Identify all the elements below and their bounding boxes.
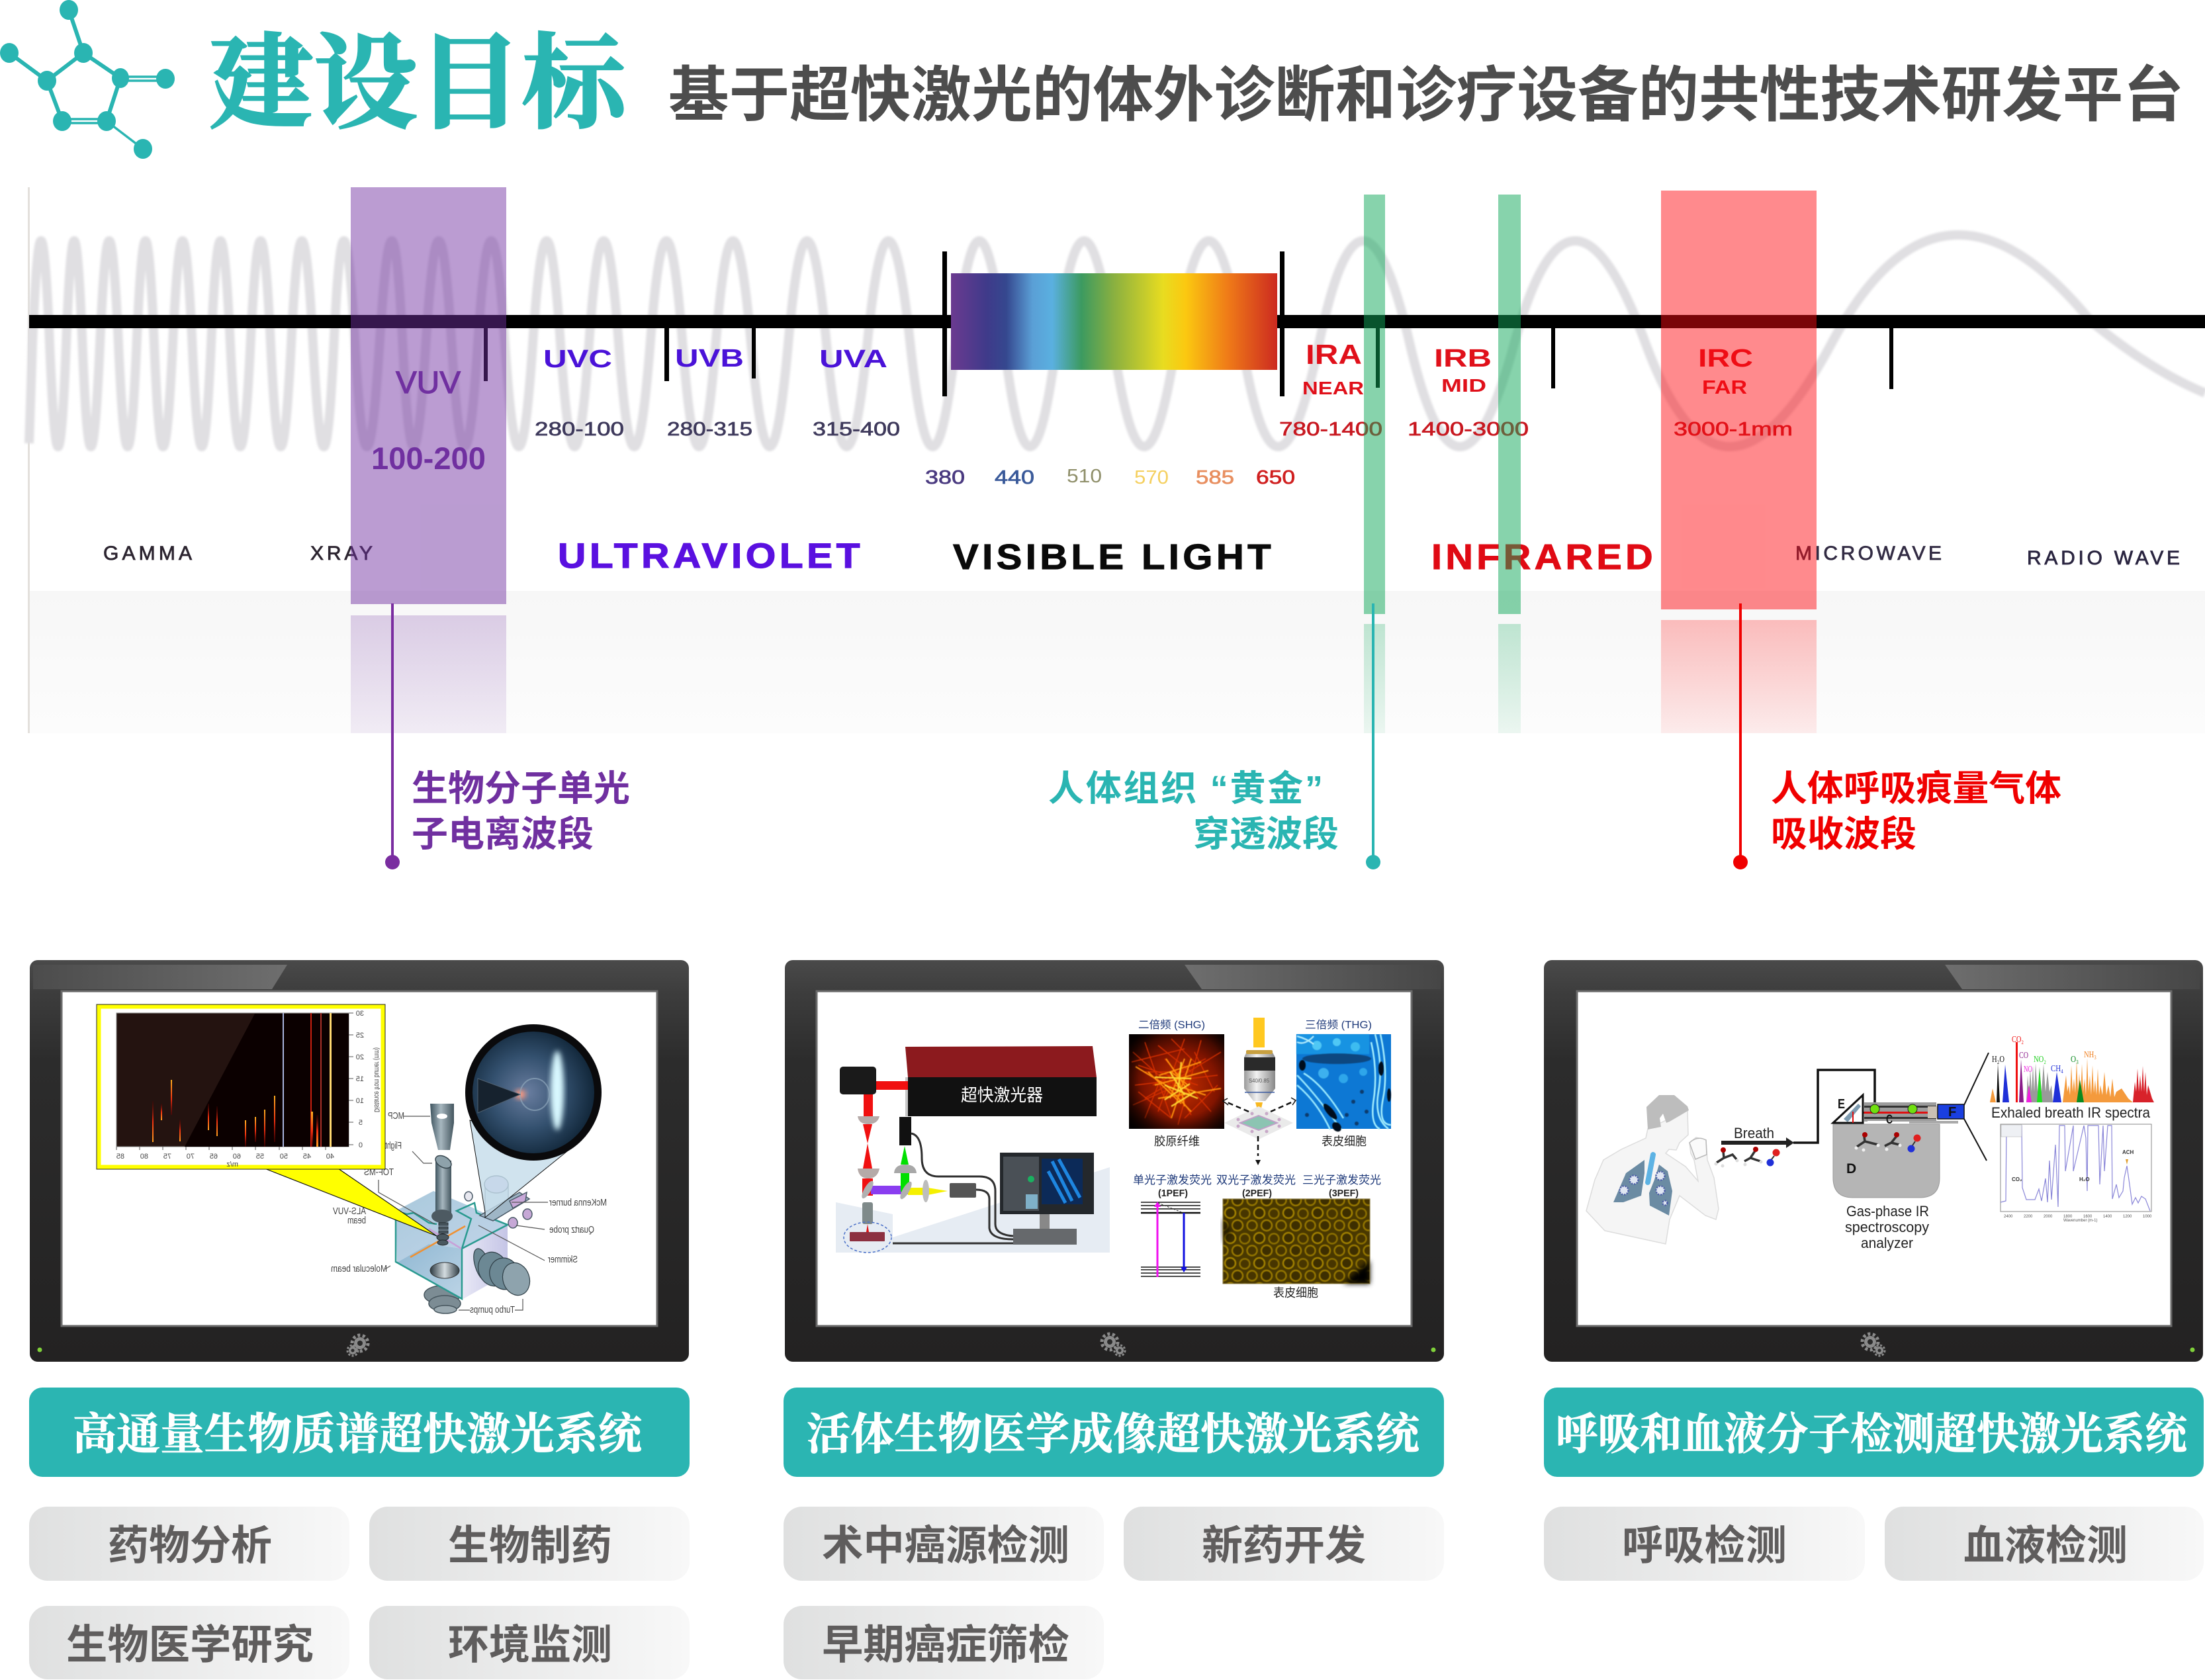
- right wall: [462, 1225, 508, 1299]
- monitor screen: [1577, 991, 2171, 1326]
- scan head: [840, 1067, 876, 1094]
- heat map axis labels (mirrored): 0: [359, 1141, 363, 1149]
- band labels: ultraviolet: UVC: [543, 345, 612, 373]
- power LED: [2190, 1347, 2194, 1352]
- tag: 生物制药: [369, 1507, 690, 1581]
- callout text: VUV band: 子电离波段: [412, 815, 594, 854]
- flame halo: [520, 1079, 549, 1110]
- gear icon: [1862, 1334, 1885, 1356]
- heat map axis labels (mirrored): 85: [116, 1153, 124, 1161]
- heat map axis labels (mirrored): 60: [233, 1153, 241, 1161]
- flight tube top: [433, 1153, 453, 1171]
- wavelength labels: ultraviolet: [535, 419, 900, 440]
- region labels: ULTRAVIOLET: [558, 537, 864, 576]
- tag: 环境监测: [369, 1606, 690, 1679]
- detector F: F: [1948, 1105, 1956, 1120]
- tag: 早期癌症筛检: [784, 1606, 1104, 1679]
- region labels: MICROWAVE: [1795, 543, 1942, 564]
- mirrored apparatus labels: McKenna burner: [549, 1197, 607, 1208]
- cables: [893, 1133, 1013, 1243]
- tag: 术中癌源检测: 术中癌源检测: [822, 1523, 1069, 1569]
- right turbo pump: [471, 1247, 534, 1299]
- tag: 药物分析: 药物分析: [108, 1523, 272, 1569]
- sine wave: [29, 235, 2205, 447]
- yellow inset frame: [99, 1006, 383, 1167]
- breath arrow: [1721, 1137, 1794, 1148]
- band highlight: IR red reflection: [1661, 620, 1817, 733]
- callout text: breath gas band: 人体呼吸痕量气体: [1771, 769, 2061, 809]
- IR absorbance chart: 2200: [2024, 1215, 2033, 1219]
- zoom lines: [1964, 1053, 1989, 1161]
- system title: breath and blood: [1544, 1388, 2204, 1477]
- objective lens: [1244, 1018, 1275, 1117]
- tag: 生物制药: 生物制药: [448, 1523, 612, 1569]
- heat map axis ticks: [116, 1013, 353, 1150]
- person figure: [1586, 1095, 1719, 1244]
- bottom turbo pump: [424, 1286, 461, 1313]
- light blue cone to lens: [470, 1120, 567, 1217]
- VUV range label: 100-200: [371, 441, 486, 476]
- wavelength labels: visible: 585: [1196, 467, 1234, 488]
- power LED: [1431, 1347, 1436, 1352]
- analyzer body D: [1833, 1124, 1940, 1198]
- region labels: INFRARED: [1431, 537, 1656, 577]
- wavelength labels: visible: 650: [1256, 467, 1295, 488]
- orange molecular beam: [410, 1226, 465, 1257]
- tag: 环境监测: 环境监测: [448, 1622, 612, 1668]
- tissue sample diamond: [1224, 1106, 1293, 1139]
- wavelength labels: infrared: 1400-3000: [1408, 419, 1529, 440]
- PEF labels: 双光子激发荧光: [1216, 1174, 1296, 1186]
- IR absorbance chart: 1800: [2063, 1215, 2073, 1219]
- round port: [430, 1262, 459, 1278]
- heat map axis labels (mirrored): 65: [210, 1153, 218, 1161]
- heat map axis labels (mirrored): 80: [140, 1153, 148, 1161]
- gas labels: CH₄: [2051, 1064, 2063, 1074]
- wavelength labels: visible: 570: [1134, 467, 1169, 488]
- region labels: XRAY: [310, 543, 373, 564]
- IR absorbance chart: 2000: [2044, 1215, 2053, 1219]
- mirrored apparatus labels: Turbo pumps: [470, 1304, 515, 1315]
- band labels: infrared: IRB: [1434, 345, 1492, 373]
- wavelength labels: visible: 380: [925, 467, 965, 488]
- ion optics: [437, 1223, 449, 1245]
- gas labels: CO₂: [2012, 1035, 2024, 1045]
- monitor glare: [1945, 965, 2200, 989]
- analyzer letter D: D: [1846, 1161, 1856, 1176]
- gas labels: O₃: [2071, 1055, 2079, 1065]
- detector F: [1938, 1104, 1964, 1120]
- flame tip: [515, 1090, 525, 1099]
- heat map axis labels (mirrored): 55: [256, 1153, 264, 1161]
- flight tube: [435, 1161, 451, 1214]
- tick marks: [484, 251, 1893, 396]
- purple beam path: [429, 1229, 461, 1249]
- analyzer caption: analyzer: [1861, 1235, 1913, 1251]
- wavelength labels: ultraviolet: 280-315: [667, 419, 752, 440]
- wavelength labels: ultraviolet: 280-100: [535, 419, 624, 440]
- monitor screen: [817, 991, 1412, 1326]
- callout text: gold window: [1048, 769, 1339, 854]
- analyzer caption: spectroscopy: [1845, 1219, 1929, 1235]
- heat map axis labels (mirrored): 40: [326, 1153, 334, 1161]
- gas labels: NO: [2024, 1065, 2032, 1075]
- tag: 呼吸检测: 呼吸检测: [1622, 1523, 1787, 1569]
- title: 建设目标: [209, 27, 633, 142]
- tag: 术中癌源检测: [784, 1507, 1104, 1581]
- gas labels: NO₂: [2034, 1055, 2046, 1065]
- IR absorbance chart: 1600: [2083, 1215, 2092, 1219]
- band highlight: NIR green 1 reflection: [1364, 624, 1385, 733]
- 3PEF cell image: [1223, 1199, 1370, 1284]
- tag: 呼吸检测: [1544, 1507, 1865, 1581]
- band labels: infrared: IRC: [1698, 345, 1753, 373]
- callout text: gold window: 穿透波段: [1193, 815, 1339, 854]
- band labels: ultraviolet: [543, 345, 887, 373]
- system title: mass spec: [29, 1388, 690, 1477]
- mirrored apparatus labels: Molecular beam: [331, 1263, 387, 1274]
- tag: 新药开发: 新药开发: [1202, 1523, 1366, 1569]
- band labels: infrared: IRA: [1306, 339, 1362, 370]
- burner tip: [478, 1079, 520, 1113]
- heat map axis labels (mirrored): 70: [187, 1153, 195, 1161]
- wavelength labels: infrared: 780-1400: [1279, 419, 1382, 440]
- monitor screen: [62, 991, 657, 1326]
- callout line: teal: [1366, 603, 1380, 869]
- molecules in analyzer: [1854, 1132, 1920, 1153]
- burner assembly: [465, 1176, 532, 1228]
- heat map axis labels (mirrored): 45: [303, 1153, 311, 1161]
- PEF labels: (2PEF): [1242, 1188, 1272, 1199]
- wavelength labels: visible: [925, 466, 1295, 488]
- power LED: [37, 1347, 42, 1352]
- spectra heading: Exhaled breath IR spectra: [1991, 1104, 2151, 1121]
- band highlight: VUV reflection: [351, 615, 506, 733]
- callout text: breath gas band: [1771, 769, 2061, 854]
- IR absorbance chart: ACH: [2122, 1149, 2134, 1155]
- system title: imaging: [784, 1388, 1444, 1477]
- icon: molecule: [0, 0, 175, 159]
- tag: 生物医学研究: [29, 1606, 349, 1679]
- lens photo: [465, 1024, 602, 1161]
- panel: monitor 2 bio-imaging: [785, 960, 1444, 1362]
- heat map axis labels (mirrored): Distance from burner (mm): [373, 1047, 381, 1112]
- band labels: ultraviolet: UVA: [819, 345, 887, 373]
- leader lines: [379, 1116, 548, 1310]
- monitor glare: [1185, 965, 1441, 989]
- IR absorbance chart: Wavenumber (m-1): [2063, 1219, 2097, 1223]
- MCP aperture: [437, 1114, 447, 1119]
- system title: imaging: 活体生物医学成像超快激光系统: [807, 1411, 1421, 1459]
- wavelength labels: visible: 510: [1067, 466, 1102, 487]
- tag: 血液检测: 血液检测: [1963, 1523, 2128, 1569]
- laser label: 超快激光器: [961, 1085, 1043, 1105]
- SHG collagen image: [1129, 1034, 1224, 1129]
- band labels: infrared: [1302, 339, 1753, 398]
- breath label: Breath: [1734, 1125, 1774, 1141]
- heat map axis labels (mirrored): 25: [356, 1032, 364, 1039]
- tag: 新药开发: [1124, 1507, 1444, 1581]
- monitor bezel: [30, 960, 689, 1362]
- heat map axis labels (mirrored): 75: [163, 1153, 171, 1161]
- beam path optics: [858, 1081, 948, 1232]
- heat map axis labels (mirrored): 20: [356, 1053, 364, 1061]
- band labels: infrared: MID: [1441, 375, 1486, 396]
- mirrored apparatus labels: beam: [347, 1215, 366, 1226]
- heat map axis labels (mirrored): [116, 1010, 381, 1169]
- mirrored apparatus labels: Skimmer: [548, 1254, 578, 1265]
- heat map axis labels (mirrored): 30: [356, 1010, 364, 1018]
- mirrored apparatus labels: [331, 1110, 607, 1315]
- prism E: E: [1838, 1097, 1845, 1112]
- VUV label: VUV: [396, 365, 461, 400]
- gas labels: H₂O: [1992, 1055, 2004, 1065]
- mirrored apparatus labels: Quartz probe: [549, 1224, 594, 1235]
- energy level diagram: [1141, 1202, 1200, 1277]
- cell caption: 表皮细胞: [1273, 1286, 1318, 1300]
- IR absorbance chart: 1200: [2123, 1215, 2132, 1219]
- detector top: [899, 1117, 911, 1145]
- mirrored apparatus labels: Flight: [384, 1140, 402, 1151]
- dashed arrows: [1223, 1098, 1296, 1165]
- callout text: VUV band: [412, 769, 630, 854]
- gas labels: CO: [2019, 1051, 2028, 1061]
- band highlight: NIR green 2 reflection: [1498, 624, 1521, 733]
- callout line: red: [1733, 603, 1748, 869]
- region labels: GAMMA: [103, 543, 192, 564]
- bench backdrop: [836, 1167, 1110, 1253]
- THG epidermis image: [1296, 1034, 1391, 1133]
- IR absorbance chart: [2001, 1124, 2152, 1223]
- teal frame: [396, 1203, 508, 1299]
- monitor bezel: [785, 960, 1444, 1362]
- analyzer caption: Gas-phase IR: [1846, 1203, 1929, 1219]
- IR absorbance chart: H₂O: [2079, 1176, 2090, 1182]
- bright plasma band: [551, 1051, 564, 1130]
- PEF labels: [1133, 1174, 1381, 1199]
- wavelength labels: visible: 440: [995, 467, 1034, 488]
- system title: mass spec: 高通量生物质谱超快激光系统: [73, 1411, 644, 1459]
- region labels: RADIO WAVE: [2027, 547, 2180, 569]
- heat map axis labels (mirrored): 10: [356, 1097, 364, 1105]
- callout text: breath gas band: 吸收波段: [1771, 815, 1916, 854]
- callout text: VUV band: 生物分子单光: [412, 769, 630, 809]
- exhaled molecules: [1714, 1147, 1780, 1167]
- wavelength labels: infrared: 3000-1mm: [1674, 419, 1793, 440]
- region labels: VISIBLE LIGHT: [953, 537, 1275, 577]
- gas labels: NH₃: [2084, 1050, 2096, 1060]
- heat map axis labels (mirrored): 5: [359, 1119, 363, 1127]
- detector right: [950, 1183, 976, 1198]
- region labels: [103, 537, 2180, 577]
- inset outer edge: [97, 1004, 385, 1169]
- gas cell C: [1853, 1102, 1958, 1127]
- band highlight: VUV purple: [351, 187, 506, 604]
- gear icon: [347, 1335, 368, 1356]
- SHG label: 二倍频 (SHG): [1138, 1019, 1205, 1031]
- system title: breath and blood: 呼吸和血液分子检测超快激光系统: [1556, 1411, 2189, 1459]
- mass spectrum heat map: [116, 1013, 349, 1147]
- gear icon: [1102, 1334, 1125, 1356]
- panel: monitor 3 breath analysis: [1544, 960, 2203, 1362]
- heat map axis labels (mirrored): 50: [280, 1153, 288, 1161]
- heat map axis labels (mirrored): m/z: [226, 1161, 238, 1169]
- heat map axis labels (mirrored): 15: [356, 1075, 364, 1083]
- ultrafast laser box: [905, 1046, 1097, 1116]
- band highlight: NIR green 2: [1498, 195, 1521, 614]
- back wall: [396, 1191, 508, 1262]
- gas labels: [1992, 1035, 2096, 1075]
- band labels: infrared: FAR: [1702, 377, 1747, 398]
- callout line: purple: [385, 603, 400, 869]
- apparatus box: [379, 1104, 548, 1313]
- gas cell C: C: [1886, 1113, 1893, 1127]
- tag: 药物分析: [29, 1507, 349, 1581]
- THG label: 三倍频 (THG): [1305, 1019, 1372, 1031]
- panel: electromagnetic spectrum: [28, 187, 2205, 733]
- band labels: infrared: NEAR: [1302, 378, 1364, 398]
- PEF labels: (1PEF): [1158, 1188, 1188, 1199]
- front lower wall: [397, 1244, 462, 1299]
- band highlight: IR red: [1661, 191, 1817, 609]
- objective lens: S40/0.85: [1249, 1078, 1270, 1084]
- panel: monitor 1 mass spectrometry: [30, 960, 689, 1362]
- visible spectrum gradient: [951, 273, 1277, 370]
- monitor bezel: [1544, 960, 2203, 1362]
- tag: 血液检测: [1885, 1507, 2204, 1581]
- wavelength labels: infrared: [1279, 419, 1793, 440]
- sampling tube: [1793, 1070, 1875, 1143]
- IR absorbance chart: 1400: [2103, 1215, 2112, 1219]
- display monitor: [1000, 1153, 1094, 1245]
- PEF labels: 单光子激发荧光: [1133, 1174, 1212, 1186]
- analyzer caption: [1845, 1203, 1929, 1251]
- prism E: [1833, 1095, 1863, 1123]
- IR absorbance chart: CO₂: [2012, 1176, 2022, 1182]
- left edge of spectrum image: [28, 187, 30, 733]
- monitor glare: [33, 965, 287, 989]
- IR absorbance chart: 1000: [2143, 1215, 2152, 1219]
- tag: 早期癌症筛检: 早期癌症筛检: [822, 1622, 1069, 1668]
- spectrum floor: [29, 591, 2205, 733]
- PEF labels: 三光子激发荧光: [1302, 1174, 1381, 1186]
- mirrored apparatus labels: TOF-MS: [364, 1167, 394, 1178]
- IR absorbance chart: 2400: [2004, 1215, 2013, 1219]
- band highlight: NIR green 1: [1364, 195, 1385, 614]
- callout text: gold window: 人体组织 “黄金”: [1048, 769, 1323, 809]
- collagen caption: 胶原纤维: [1154, 1135, 1200, 1148]
- yellow callout wedge: [265, 1169, 437, 1236]
- subtitle: 基于超快激光的体外诊断和诊疗设备的共性技术研发平台: [668, 62, 2184, 129]
- exhaled IR spectra: [1990, 1035, 2154, 1102]
- MCP detector: [430, 1104, 454, 1150]
- mirrored apparatus labels: ALS-VUV: [333, 1206, 366, 1217]
- band labels: ultraviolet: UVB: [675, 345, 744, 373]
- PEF labels: (3PEF): [1329, 1188, 1359, 1199]
- epidermis caption: 表皮细胞: [1322, 1135, 1367, 1148]
- wavelength labels: ultraviolet: 315-400: [813, 419, 900, 440]
- sample stage: [844, 1222, 891, 1253]
- mirrored apparatus labels: MCP: [388, 1110, 404, 1122]
- flight tube flange: [431, 1210, 453, 1223]
- lungs: [1613, 1160, 1672, 1216]
- trachea: [1648, 1155, 1653, 1182]
- axis bar: [29, 315, 2205, 328]
- tag: 生物医学研究: 生物医学研究: [66, 1622, 314, 1668]
